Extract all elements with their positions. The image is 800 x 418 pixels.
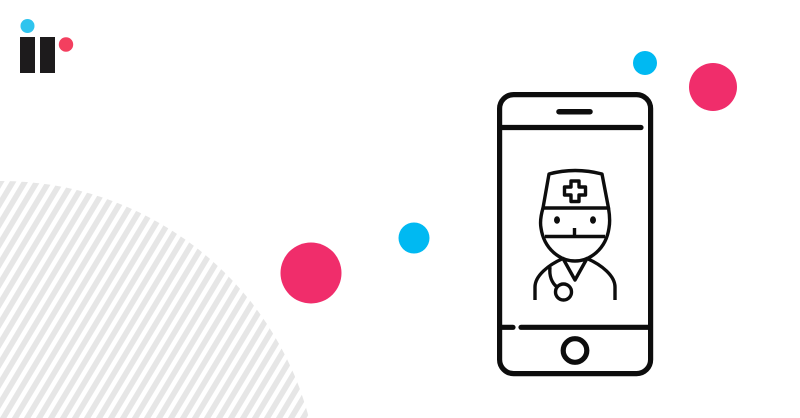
icon: doctor [535, 170, 615, 300]
stethoscope [550, 267, 557, 287]
blue dot top right [633, 51, 657, 75]
doctor cap [543, 170, 608, 208]
large pink dot left [280, 242, 342, 304]
stethoscope chest piece [556, 284, 572, 300]
icon: smartphone [500, 95, 651, 374]
pink dot top right [689, 63, 737, 111]
logo [20, 19, 73, 73]
striped quarter circle background [0, 181, 308, 418]
blue dot centre [398, 222, 430, 254]
doctor face [541, 208, 610, 261]
eyes [554, 216, 596, 224]
cap cross [564, 181, 586, 202]
coat collar and shoulders [535, 258, 615, 300]
nose [573, 228, 576, 236]
face mask line [545, 235, 605, 238]
